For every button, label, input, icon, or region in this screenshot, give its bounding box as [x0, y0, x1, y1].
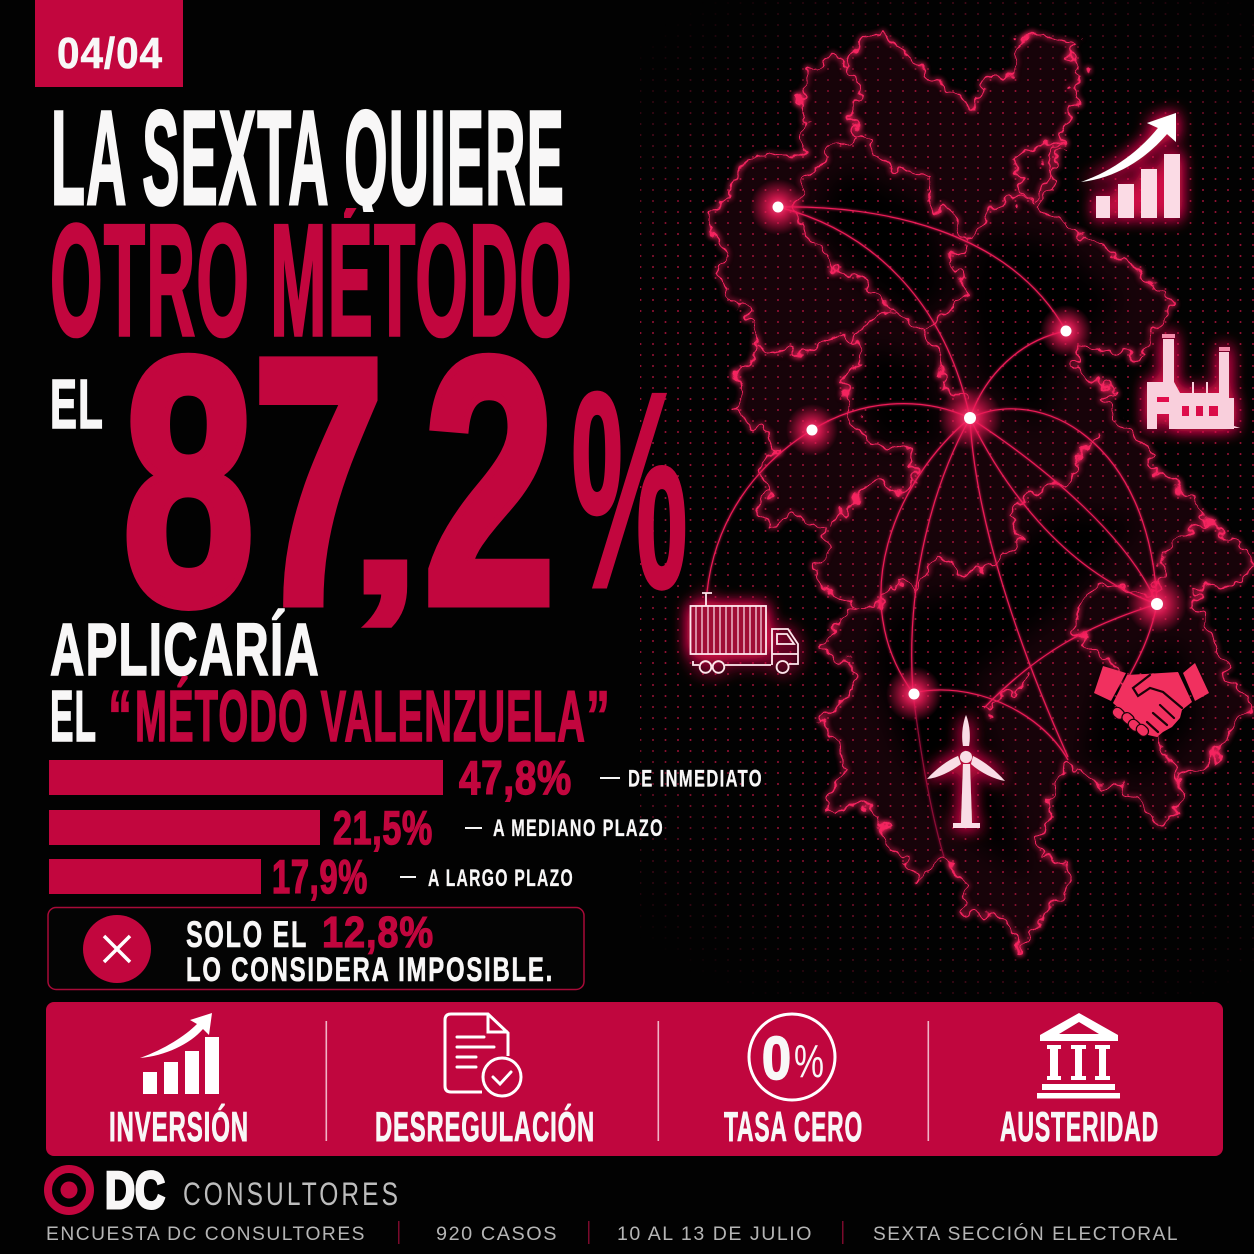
- icon: wind turbine: [927, 715, 1005, 828]
- icon: zero percent: [749, 1014, 835, 1100]
- tag: 04/04: 04/04: [57, 29, 163, 78]
- callout: solo el 12,8%: 12,8%: [322, 908, 434, 957]
- callout: solo el 12,8%: LO CONSIDERA IMPOSIBLE.: [186, 951, 554, 989]
- callout: solo el 12,8%: SOLO EL: [186, 914, 308, 955]
- big figure: 87,2 percent: 2: [423, 284, 556, 678]
- text: el método valenzuela: MÉTODO VALENZUELA: [135, 677, 586, 757]
- dark central regions: [820, 170, 1200, 880]
- logo: DC Consultores: CONSULTORES: [183, 1176, 401, 1212]
- bar: a largo plazo: 17,9%: [272, 850, 368, 903]
- icon: zero percent: %: [794, 1035, 824, 1087]
- map panel: [640, 0, 1254, 1000]
- footer: survey details: 10 AL 13 DE JULIO: [617, 1224, 813, 1245]
- infographic canvas: %: [571, 335, 688, 647]
- bar: a mediano plazo: [49, 801, 664, 854]
- big figure: 87,2 percent: 7: [252, 284, 385, 678]
- icon: factory: [1147, 334, 1240, 429]
- footer: survey details: [46, 1221, 1179, 1245]
- icon: x circle: [83, 915, 151, 983]
- text: el método valenzuela: “: [108, 677, 132, 757]
- icon: logo target: [48, 1169, 90, 1211]
- icon: growth chart (map): [1081, 113, 1180, 218]
- footer: survey details: SEXTA SECCIÓN ELECTORAL: [873, 1223, 1179, 1245]
- big figure: 87,2 percent: ,: [346, 398, 424, 639]
- icon: container truck: [690, 593, 798, 673]
- footer: survey details: ENCUESTA DC CONSULTORES: [46, 1224, 366, 1245]
- text: el método valenzuela: [50, 677, 610, 757]
- bar: de inmediato: [49, 751, 763, 804]
- glowing nodes: [750, 179, 1187, 722]
- icon: handshake: [1094, 663, 1209, 738]
- icon: zero percent: 0: [762, 1025, 791, 1092]
- connection arcs: [707, 207, 1157, 857]
- panel: policies: [46, 1002, 1223, 1156]
- label: desregulación: DESREGULACIÓN: [375, 1102, 595, 1150]
- infographic canvas: OTRO MÉTODO: [50, 191, 573, 369]
- bar chart: [49, 751, 763, 903]
- map region fill: [707, 30, 1253, 950]
- label: tasa cero: TASA CERO: [724, 1103, 863, 1150]
- text: el método valenzuela: ”: [586, 677, 610, 757]
- icon: document with check: [445, 1014, 521, 1096]
- bar: de inmediato: 47,8%: [459, 751, 572, 804]
- text: aplicaría: APLICARÍA: [50, 608, 320, 691]
- icon: investment chart: [140, 1013, 219, 1094]
- map borders: [707, 30, 1253, 950]
- label: EL: EL: [50, 365, 104, 443]
- dot grid: [640, 0, 1254, 1000]
- bar: a mediano plazo: 21,5%: [333, 801, 433, 854]
- text: el método valenzuela: EL: [50, 677, 97, 757]
- bar: a mediano plazo: A MEDIANO PLAZO: [493, 815, 664, 842]
- icon: bank building: [1037, 1013, 1120, 1098]
- big figure: 87,2 percent: 8: [122, 284, 255, 678]
- label: inversión: INVERSIÓN: [109, 1102, 249, 1150]
- bar: a largo plazo: A LARGO PLAZO: [428, 865, 574, 892]
- bar: a largo plazo: [49, 850, 574, 903]
- logo: DC Consultores: [48, 1162, 401, 1220]
- callout: solo el 12,8%: [48, 908, 584, 990]
- logo: DC Consultores: DC: [105, 1162, 165, 1220]
- infographic canvas: LA SEXTA QUIERE: [51, 84, 565, 233]
- tag: 04/04: [35, 0, 183, 87]
- footer: survey details: 920 CASOS: [436, 1224, 558, 1245]
- big figure: 87,2 percent: [122, 284, 688, 678]
- bar: de inmediato: DE INMEDIATO: [628, 766, 763, 792]
